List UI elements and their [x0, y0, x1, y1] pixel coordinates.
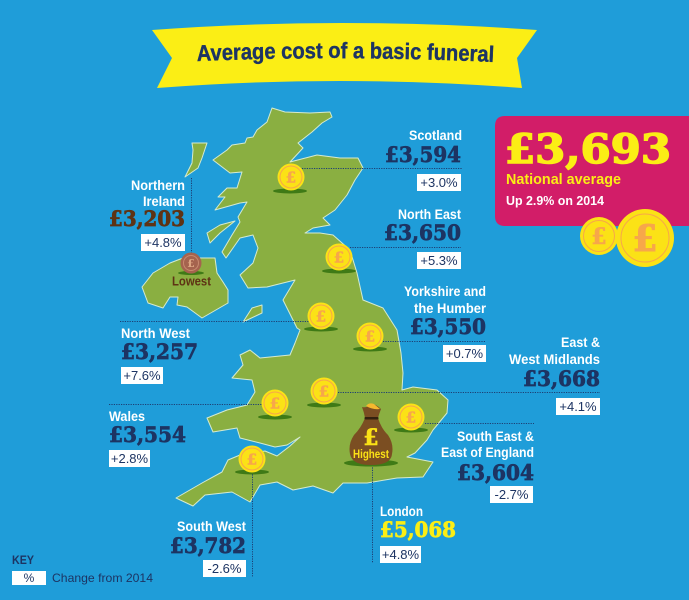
- region: North West: £3,257: [121, 339, 198, 364]
- panel: national average: [495, 116, 689, 226]
- coin: South East: [394, 404, 428, 432]
- coin: Northern Ireland lowest: Lowest: [172, 274, 212, 288]
- national average figure: £3,693: [505, 126, 671, 173]
- title banner: [152, 23, 537, 88]
- coin: North East: £: [334, 248, 344, 266]
- region: South East and East of England: -2.7%: [495, 487, 529, 502]
- region: Yorkshire and the Humber: the Humber: [414, 301, 487, 316]
- coin: South West: £: [247, 450, 257, 468]
- region: Yorkshire and the Humber: £3,550: [410, 314, 486, 339]
- national average label: National average: [506, 172, 621, 188]
- region: Wales: +2.8%: [111, 451, 149, 466]
- coin: Northern Ireland lowest: £: [187, 257, 195, 270]
- key: %: [24, 571, 35, 585]
- region: North East: +5.3%: [420, 253, 458, 268]
- region: Yorkshire and the Humber: [404, 284, 487, 362]
- region: Wales: [109, 409, 186, 467]
- Great Britain: [176, 108, 448, 506]
- region: Scotland: +3.0%: [420, 175, 458, 190]
- region: East and West Midlands: +4.1%: [559, 399, 597, 414]
- region: East and West Midlands: [509, 335, 600, 415]
- region: South East and East of England: £3,604: [457, 460, 534, 485]
- region: London: [380, 504, 456, 563]
- region: London: London: [380, 504, 423, 519]
- region: North East: [384, 207, 461, 269]
- coin: South East: £: [406, 408, 416, 426]
- region: Northern Ireland: [109, 178, 185, 251]
- region: Scotland: [385, 128, 462, 191]
- icon: pair of coins: £: [632, 218, 658, 260]
- coin: Wales: [258, 390, 292, 420]
- region: South East and East of England: East of England: [441, 445, 534, 460]
- coin: East and West Midlands: [307, 378, 341, 408]
- coin: Northern Ireland lowest: [172, 252, 212, 288]
- region: East and West Midlands: £3,668: [523, 366, 600, 391]
- money bag: London highest: £: [363, 425, 379, 451]
- Northern Ireland: [142, 258, 228, 318]
- coin: North West: [304, 302, 338, 332]
- Islay: [207, 221, 235, 243]
- coin: South West: [235, 446, 269, 474]
- region: North East: £3,650: [384, 220, 461, 245]
- Outer Hebrides: [185, 143, 207, 177]
- region: Scotland: £3,594: [385, 142, 461, 167]
- region: South East and East of England: [441, 429, 534, 503]
- region: East and West Midlands: West Midlands: [509, 352, 600, 367]
- region: Wales: £3,554: [109, 422, 186, 447]
- region: South West: South West: [177, 519, 246, 534]
- coin: Scotland: [273, 164, 307, 194]
- key: [12, 553, 153, 585]
- coin: North West: £: [316, 308, 326, 326]
- region: South West: [170, 519, 246, 577]
- region: North West: [121, 326, 198, 384]
- icon: pair of coins: [580, 209, 674, 267]
- region: London: +4.8%: [382, 547, 420, 562]
- coin: North East: [322, 244, 356, 274]
- region: Northern Ireland: Ireland: [143, 194, 185, 209]
- region: North West: +7.6%: [123, 368, 161, 383]
- region: East and West Midlands: East &: [561, 335, 600, 350]
- icon: pair of coins: £: [591, 224, 607, 250]
- map of the UK: [142, 108, 448, 506]
- key: KEY: [12, 553, 34, 567]
- region: Yorkshire and the Humber: Yorkshire and: [404, 284, 486, 299]
- coin: Yorkshire and the Humber: [353, 322, 387, 352]
- money bag: London highest: [344, 403, 398, 466]
- title: Average cost of a basic funeral: [197, 42, 494, 64]
- coin: Wales: £: [270, 394, 280, 412]
- coin: East and West Midlands: £: [319, 382, 329, 400]
- money bag: London highest: Highest: [353, 447, 389, 461]
- region: North East: North East: [398, 207, 461, 222]
- region: Northern Ireland: Northern: [131, 178, 185, 193]
- coin: Scotland: £: [286, 168, 296, 186]
- region: North West: North West: [121, 326, 190, 341]
- key: Change from 2014: [52, 571, 153, 585]
- region: South West: -2.6%: [208, 561, 242, 576]
- region: Scotland: Scotland: [409, 128, 462, 143]
- Isle of Man: [243, 305, 262, 322]
- region: Wales: Wales: [109, 409, 145, 424]
- leader lines: [109, 168, 600, 577]
- region: London: £5,068: [380, 517, 456, 542]
- region: Northern Ireland: +4.8%: [144, 235, 182, 250]
- region: Northern Ireland: £3,203: [109, 206, 185, 231]
- region: Yorkshire and the Humber: +0.7%: [446, 346, 484, 361]
- change text: Up 2.9% on 2014: [506, 194, 604, 208]
- region: South West: £3,782: [170, 533, 246, 558]
- region: South East and East of England: South East &: [457, 429, 534, 444]
- coin: Yorkshire and the Humber: £: [365, 328, 375, 346]
